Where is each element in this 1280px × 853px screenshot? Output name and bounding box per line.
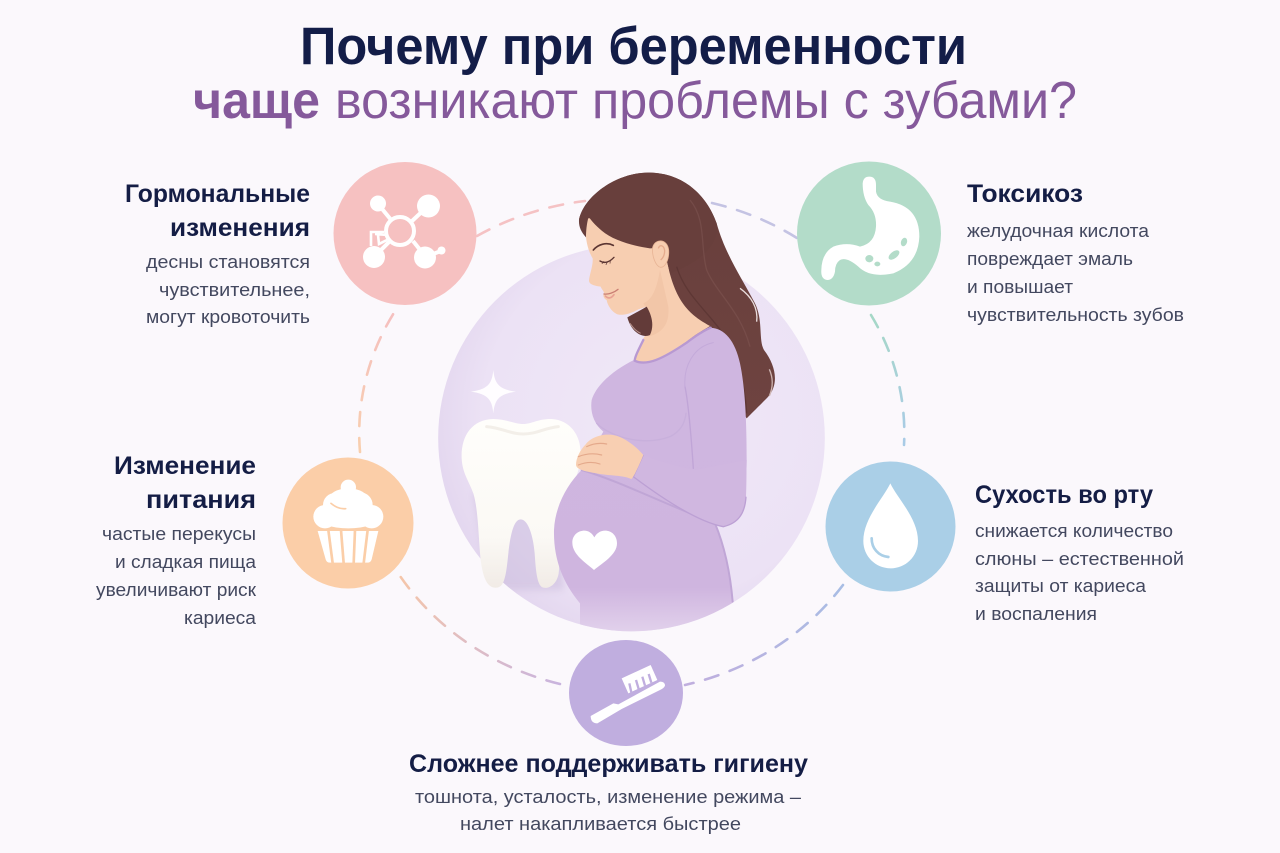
text block: слюны – естественной <box>975 549 1184 569</box>
text block <box>967 221 1184 325</box>
panel: dry mouth <box>826 462 1184 624</box>
icon: heart on belly <box>572 531 617 570</box>
panel: diet change <box>96 452 414 628</box>
title <box>193 17 1077 130</box>
text block <box>146 252 310 327</box>
dress <box>554 328 747 633</box>
sleeve and bust shading <box>582 328 733 602</box>
text block <box>975 521 1184 624</box>
text block: чувствительнее, <box>159 280 310 300</box>
text block: и воспаления <box>975 604 1097 624</box>
heading: изменения <box>170 214 310 242</box>
text block: желудочная кислота <box>967 221 1150 241</box>
panel: toxicosis <box>797 162 1184 325</box>
ear <box>653 241 669 267</box>
text block: налет накапливается быстрее <box>460 814 741 834</box>
heading: Сложнее поддерживать гигиену <box>409 750 808 778</box>
panel: hormonal changes <box>125 162 476 327</box>
text block: могут кровоточить <box>146 307 310 327</box>
arm <box>685 460 747 525</box>
heading: Гормональные <box>125 180 310 208</box>
text block: защиты от кариеса <box>975 576 1147 596</box>
text block: кариеса <box>184 608 257 628</box>
skin: face and neck <box>586 217 710 362</box>
panel: hygiene <box>409 640 808 834</box>
neck shadow <box>643 270 669 337</box>
icon: stomach <box>797 162 941 306</box>
hair under chin <box>627 307 652 336</box>
heading: Сухость во рту <box>975 481 1153 509</box>
back hair <box>579 173 775 418</box>
hand <box>576 435 643 479</box>
heading <box>114 452 256 514</box>
text block: тошнота, усталость, изменение режима – <box>415 787 801 807</box>
text block <box>96 524 257 628</box>
text block: и повышает <box>967 277 1073 297</box>
icon: water drop <box>826 462 956 592</box>
icon: tooth <box>462 419 581 588</box>
text block: увеличивают риск <box>96 580 256 600</box>
text block: частые перекусы <box>102 524 256 544</box>
eyebrow, eye and mouth <box>593 244 618 298</box>
tooth shadow <box>473 493 563 590</box>
icon: toothbrush <box>569 640 683 746</box>
text block: чувствительность зубов <box>967 305 1184 325</box>
text block: десны становятся <box>146 252 310 272</box>
top hair <box>579 173 717 273</box>
central illustration: pregnant woman with tooth <box>438 173 825 633</box>
icon: molecule <box>334 162 476 305</box>
text block: и сладкая пища <box>115 552 257 572</box>
title: чаще <box>193 72 320 130</box>
text block <box>415 787 801 834</box>
heading: Изменение <box>114 452 256 480</box>
heading: Токсикоз <box>967 180 1083 208</box>
heading: питания <box>146 486 256 514</box>
text block: снижается количество <box>975 521 1173 541</box>
text block: повреждает эмаль <box>967 249 1133 269</box>
hair strands <box>677 200 772 413</box>
title: Почему при беременности <box>300 17 967 76</box>
icon: sparkle <box>471 370 516 413</box>
lilac backdrop circle <box>438 245 825 631</box>
heading <box>125 180 310 242</box>
icon: cupcake <box>282 458 414 588</box>
dashed ring <box>359 201 904 685</box>
title: возникают проблемы с зубами? <box>335 72 1077 130</box>
